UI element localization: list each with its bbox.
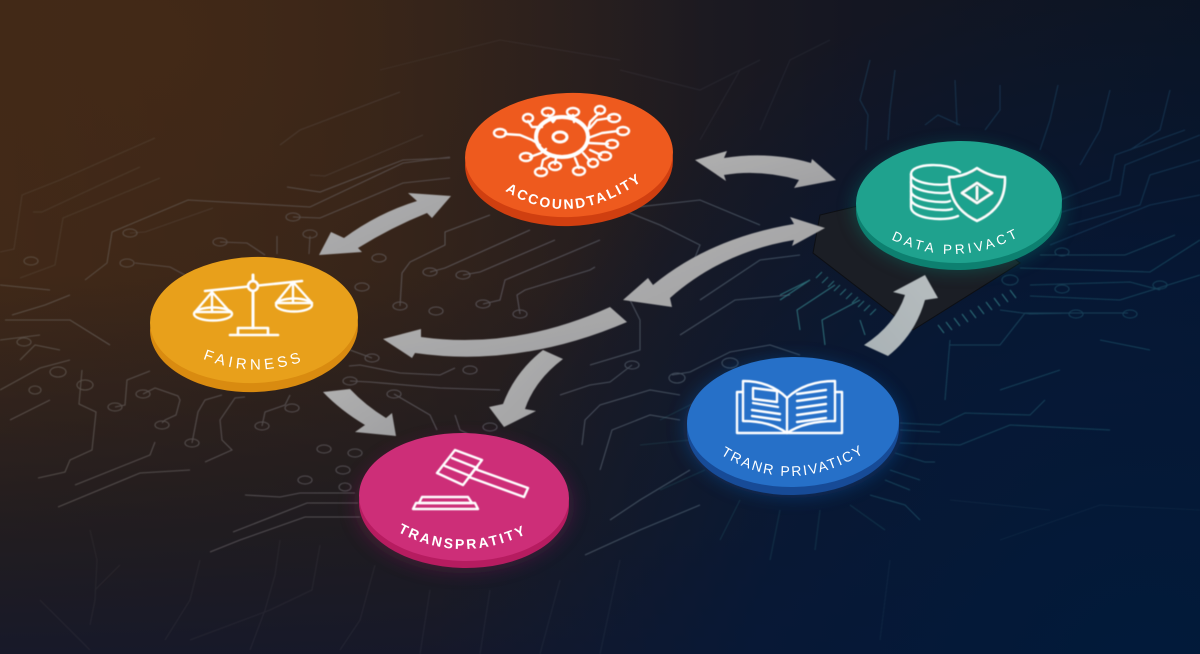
label: data privacy: DATA PRIVACT [892,228,1015,254]
disc: transparency [359,433,569,568]
icon: gavel [413,450,528,509]
icon: open book [737,381,842,433]
disc: accountability [465,92,673,226]
arrow: fairness to accountability, two-way [319,193,451,255]
icon: neural circuit node [494,106,629,176]
disc: data privacy [856,141,1062,270]
icon: database stack and shield [911,165,1005,221]
label: fairness: FAIRNESS [204,350,300,370]
arrow: down to transparency [489,350,563,427]
arrow: fairness to transparency [323,389,396,436]
arrow: accountability to data privacy, two-way [695,151,836,188]
disc: privacy [687,357,899,495]
arrow: long curve toward data privacy, two-way [623,217,825,307]
icon: balance scale [194,275,312,335]
microchip beneath data privacy disc [813,190,1020,330]
label: transparency: TRANSPRATITY [400,523,522,549]
disc: fairness [150,256,358,392]
label: accountability: ACCOUNDTALITY [505,174,638,210]
arrow: blue disc up to data privacy [864,275,938,356]
coloured glows [354,144,1065,573]
label: privacy: TRANR PRIVATICY [724,445,860,476]
arrow: curve into fairness [383,307,627,358]
